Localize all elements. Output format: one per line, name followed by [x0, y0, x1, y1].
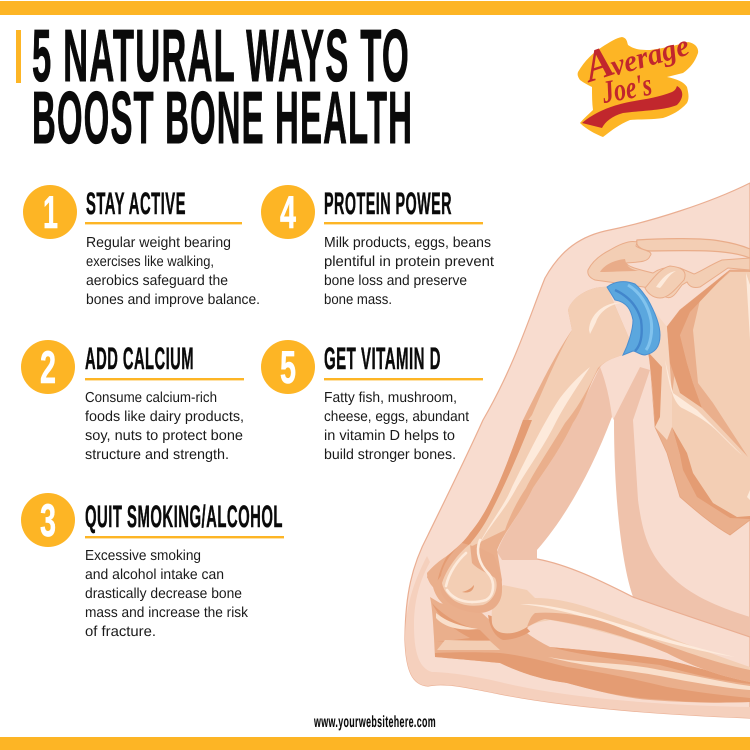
text 4: plentiful in protein prevent: [324, 254, 494, 270]
torso shade: [613, 367, 750, 637]
bottom bar: [0, 737, 750, 750]
badge 5: 5: [280, 341, 296, 393]
upper arm muscle shade: [497, 367, 612, 560]
acromion: [588, 241, 750, 298]
text 4: [324, 235, 494, 308]
scapula neck shadow: [648, 352, 662, 427]
text 2: Consume calcium-rich: [85, 390, 217, 406]
item 1: stay active: STAY ACTIVE: [86, 186, 186, 221]
text 5: build stronger bones.: [324, 447, 456, 463]
scapula neck bone: [646, 312, 672, 440]
forearm gap between bones: [527, 621, 668, 656]
badge 4: [261, 185, 315, 239]
text 1: exercises like walking,: [86, 254, 214, 270]
scapula lower dark band: [672, 427, 750, 519]
badge 4: 4: [280, 186, 296, 238]
ulna dark stripe: [432, 603, 490, 642]
scapula highlights: [665, 360, 742, 455]
badge 5: [261, 340, 315, 394]
badge 2: 2: [40, 341, 56, 393]
ulna lower dark edge: [435, 652, 750, 703]
item 4: protein power: [261, 185, 494, 308]
text 5: Fatty fish, mushroom,: [324, 390, 457, 406]
humerus shaft and head: [427, 287, 632, 613]
ulna: [430, 597, 750, 703]
text 5: in vitamin D helps to: [324, 428, 455, 444]
text 1: aerobics safeguard the: [86, 273, 228, 289]
badge 1: 1: [43, 186, 58, 238]
text 3: [85, 548, 249, 640]
scapula outer edge: [650, 270, 750, 535]
item 4: protein power: PROTEIN POWER: [324, 186, 452, 221]
text 3: of fracture.: [85, 624, 156, 640]
clavicle: [637, 239, 750, 258]
text 4: Milk products, eggs, beans: [324, 235, 491, 251]
white gap between arm and torso: [537, 417, 633, 597]
logo: Average Joe's: Joe's: [598, 66, 654, 110]
humerus highlight: [476, 367, 590, 550]
text 2: structure and strength.: [85, 447, 229, 463]
title accent bar: [16, 30, 21, 83]
text: QUIT SMOKING/ALCOHOL: [85, 499, 283, 534]
humerus condyle: [442, 544, 497, 606]
badge 2: [21, 340, 75, 394]
text 2: foods like dairy products,: [85, 409, 244, 425]
text 1: [86, 235, 260, 308]
text 5: cheese, eggs, abundant: [324, 409, 469, 425]
humerus head light: [468, 287, 632, 548]
condyle highlights: [446, 540, 493, 602]
olecranon tip: [427, 556, 447, 587]
arm skin silhouette: [405, 183, 750, 718]
radius lower stripe: [527, 613, 750, 682]
text 4: bone mass.: [324, 292, 392, 308]
badge 3: 3: [40, 494, 56, 546]
item 2: add calcium: ADD CALCIUM: [85, 341, 194, 376]
scapula upper mid band: [680, 270, 748, 457]
text 5: [324, 390, 469, 463]
humerus condyle base: [440, 543, 502, 613]
item 5: get vitamin d: [261, 340, 483, 463]
logo: Average Joe's: [575, 29, 698, 137]
item 2: add calcium: [21, 340, 244, 463]
scapula body: [672, 272, 750, 518]
text 2: soy, nuts to protect bone: [85, 428, 243, 444]
logo: Average Joe's: verage: [607, 29, 693, 83]
elbow and forearm rim shade: [405, 556, 750, 718]
text 2: [85, 390, 244, 463]
acromion shadow: [600, 259, 640, 272]
text 3: drastically decrease bone: [85, 586, 242, 602]
footer url: www.yourwebsitehere.com: [313, 714, 436, 731]
scapula upper dark band: [667, 270, 730, 408]
logo: Average Joe's: A: [575, 36, 620, 92]
title: [32, 14, 413, 159]
radius head shadow: [488, 615, 540, 640]
ulna upper dark stripe: [550, 647, 750, 684]
top bar: [0, 1, 750, 15]
text 1: Regular weight bearing: [86, 235, 231, 251]
text 1: bones and improve balance.: [86, 292, 260, 308]
text 3: Excessive smoking: [85, 548, 201, 564]
text 3: and alcohol intake can: [85, 567, 224, 583]
text 4: bone loss and preserve: [324, 273, 467, 289]
humerus left dark stripe: [427, 420, 532, 587]
item 1: stay active: [23, 185, 260, 308]
condyle crease: [462, 585, 474, 593]
cartilage: blue ring: [607, 282, 660, 355]
radius: [492, 585, 750, 682]
acromion process bump: [645, 266, 685, 298]
item 3: quit smoking/alcohol: [21, 493, 284, 640]
badge 3: [21, 493, 75, 547]
radius highlight: [520, 604, 735, 657]
badge 1: [23, 185, 77, 239]
illustration: arm and shoulder anatomy: [405, 183, 750, 718]
ulna highlights: [548, 657, 750, 690]
item 5: get vitamin d: GET VITAMIN D: [324, 341, 441, 376]
text 3: mass and increase the risk: [85, 605, 249, 621]
